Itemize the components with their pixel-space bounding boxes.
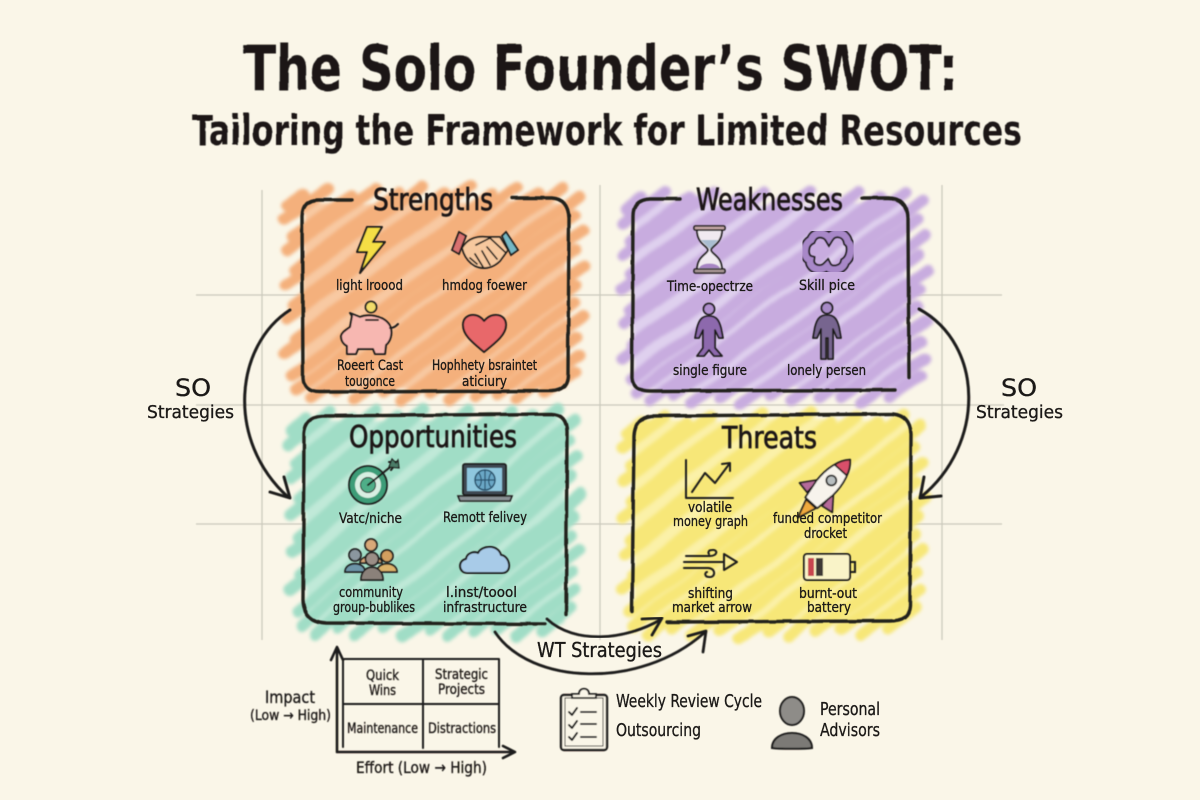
label: heart: Hophhety bsraintet — [432, 358, 537, 374]
axis label: impact range: (Low → High) — [250, 708, 331, 724]
heading: strengths: Strengths — [373, 183, 493, 218]
frame: strengths — [302, 198, 569, 392]
label: light: light lroood — [336, 278, 403, 294]
icon: piggy bank — [341, 302, 398, 354]
icon: rocket — [782, 445, 866, 532]
cell: strategic projects: Projects — [438, 682, 485, 698]
arrow: left SO — [245, 310, 290, 498]
label: SO strategies left — [147, 374, 234, 423]
cell: strategic projects: Strategic — [435, 667, 488, 683]
title — [192, 32, 1022, 155]
label: community: community — [339, 585, 403, 601]
cell: distractions: Distractions — [428, 721, 496, 737]
axis label: impact: Impact — [265, 688, 315, 708]
label: remote: Remott felivey — [443, 510, 527, 526]
icon: volatile graph — [686, 460, 733, 498]
panel: strengths — [284, 183, 586, 401]
label: cloud: l.inst/toool — [446, 585, 517, 601]
icon: single figure — [695, 304, 723, 356]
label: burnt-out: burnt-out — [799, 586, 857, 602]
arrow: WT upper — [547, 618, 662, 637]
label: handshake: hmdog foewer — [442, 278, 528, 294]
icon: hourglass — [694, 226, 725, 273]
label: low cost line 2: tougonce — [345, 374, 395, 390]
cell: quick wins: Quick — [366, 668, 400, 684]
label: niche: Vatc/niche — [339, 511, 402, 527]
label: money graph: money graph — [673, 514, 748, 530]
cell: maintenance: Maintenance — [347, 721, 418, 737]
label: funded competitor: funded competitor — [773, 511, 883, 527]
label: SO strategies left: Strategies — [147, 402, 234, 423]
text: personal advisors — [820, 699, 880, 741]
icon: heart — [463, 315, 506, 352]
frame: weaknesses — [632, 198, 909, 391]
label: market arrow: market arrow — [672, 600, 752, 616]
icon: lightning bolt — [357, 227, 385, 273]
icon: person — [772, 697, 812, 749]
text: outsourcing: Outsourcing — [616, 720, 701, 741]
icon: puzzle ring — [805, 233, 851, 270]
label: SO strategies right: Strategies — [976, 402, 1063, 423]
label: battery: battery — [807, 600, 852, 616]
frame: opportunities — [303, 414, 567, 624]
label: skill: Skill pice — [799, 278, 855, 294]
label: heart line 2: aticiury — [462, 374, 508, 390]
panel: opportunities — [288, 409, 581, 639]
heading: opportunities: Opportunities — [349, 420, 517, 455]
arrow: right SO — [919, 309, 969, 498]
text: personal advisors: Advisors — [820, 720, 880, 741]
heading: threats: Threats — [721, 421, 817, 456]
label: low cost: Roeert Cast — [337, 358, 403, 374]
icon: shifting arrow — [684, 550, 737, 577]
label: lonely person: lonely persen — [787, 363, 866, 379]
icon: clipboard — [561, 689, 607, 750]
label: SO strategies left: SO — [175, 374, 211, 402]
label: time: Time-opectrze — [666, 279, 753, 295]
arrow: WT lower — [495, 631, 706, 674]
text: weekly review cycle: Weekly Review Cycle — [616, 691, 762, 712]
grid lines — [196, 185, 1004, 640]
frame: threats — [632, 414, 911, 622]
cell: strategic projects — [435, 667, 488, 698]
icon: target — [349, 459, 399, 504]
axis label: effort: Effort (Low → High) — [356, 758, 487, 777]
cell: quick wins: Wins — [369, 683, 396, 699]
icon: community group — [345, 539, 397, 580]
icon: handshake — [452, 232, 518, 268]
panel: weaknesses — [622, 183, 930, 404]
label: SO strategies right — [976, 374, 1063, 423]
label: volatile: volatile — [688, 500, 732, 516]
heading: weaknesses: Weaknesses — [696, 183, 843, 218]
label: SO strategies right: SO — [1001, 374, 1037, 402]
icon: cloud — [460, 547, 509, 573]
label: rocket: drocket — [804, 526, 847, 542]
label: single figure: single figure — [673, 363, 747, 379]
label: infrastructure: infrastructure — [443, 600, 527, 616]
panel: threats — [622, 413, 927, 638]
subtitle: Tailoring the Framework for Limited Resources — [192, 106, 1022, 155]
icon: laptop — [458, 464, 512, 501]
label: WT strategies: WT Strategies — [537, 638, 662, 662]
cell: quick wins — [366, 668, 400, 699]
title: The Solo Founder’s SWOT: — [243, 32, 958, 105]
icon: battery — [804, 554, 855, 580]
label: shifting: shifting — [688, 586, 733, 602]
label: community line 2: group-bublikes — [333, 600, 415, 616]
text: personal advisors: Personal — [820, 699, 880, 720]
icon: lonely person — [813, 302, 841, 359]
chart: impact effort matrix — [250, 647, 515, 777]
